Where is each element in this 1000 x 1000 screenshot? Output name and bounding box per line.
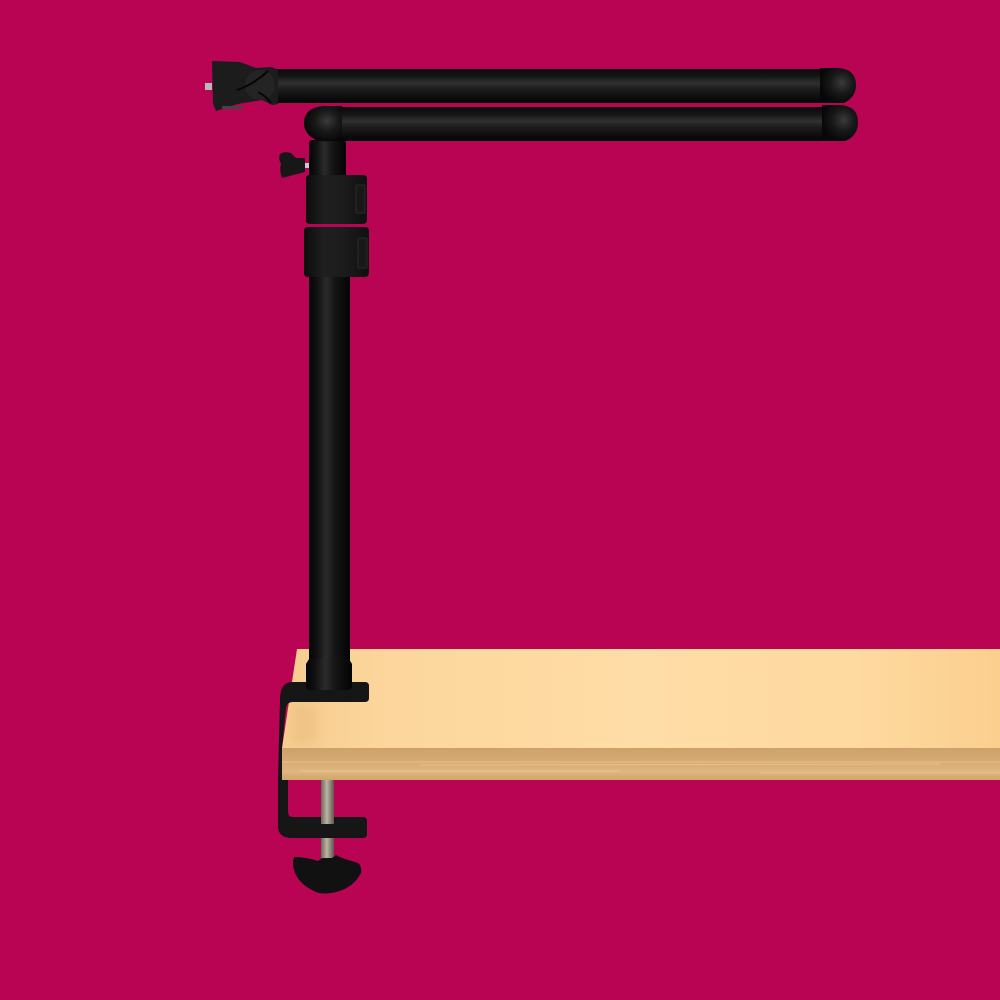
upper pole tube — [309, 140, 346, 180]
vertical pole — [279, 140, 369, 690]
threaded screw — [321, 780, 334, 860]
side lock knob — [279, 152, 309, 178]
clamp bracket — [278, 682, 369, 838]
lower arm end cap — [822, 105, 858, 141]
mounting stud — [205, 83, 212, 90]
desk board — [282, 649, 1000, 780]
head slot — [222, 106, 242, 109]
desk front edge — [282, 748, 1000, 780]
head body — [212, 61, 278, 111]
base collar — [306, 659, 352, 690]
lower pole tube — [309, 270, 350, 665]
swivel joint — [245, 70, 275, 100]
clamp knob — [293, 855, 361, 894]
lower arm tube — [340, 107, 828, 141]
desk clamp — [278, 682, 369, 894]
upper arm tube — [272, 69, 824, 103]
height clamp upper — [306, 175, 367, 224]
upper arm end cap — [820, 68, 856, 103]
mount head — [205, 61, 278, 111]
lower horizontal arm — [304, 105, 858, 141]
clamp shadow on desk — [292, 704, 318, 744]
desk top surface — [282, 649, 1000, 748]
upper horizontal arm — [272, 68, 856, 103]
height clamp lower — [304, 227, 369, 277]
elbow joint — [304, 106, 342, 141]
